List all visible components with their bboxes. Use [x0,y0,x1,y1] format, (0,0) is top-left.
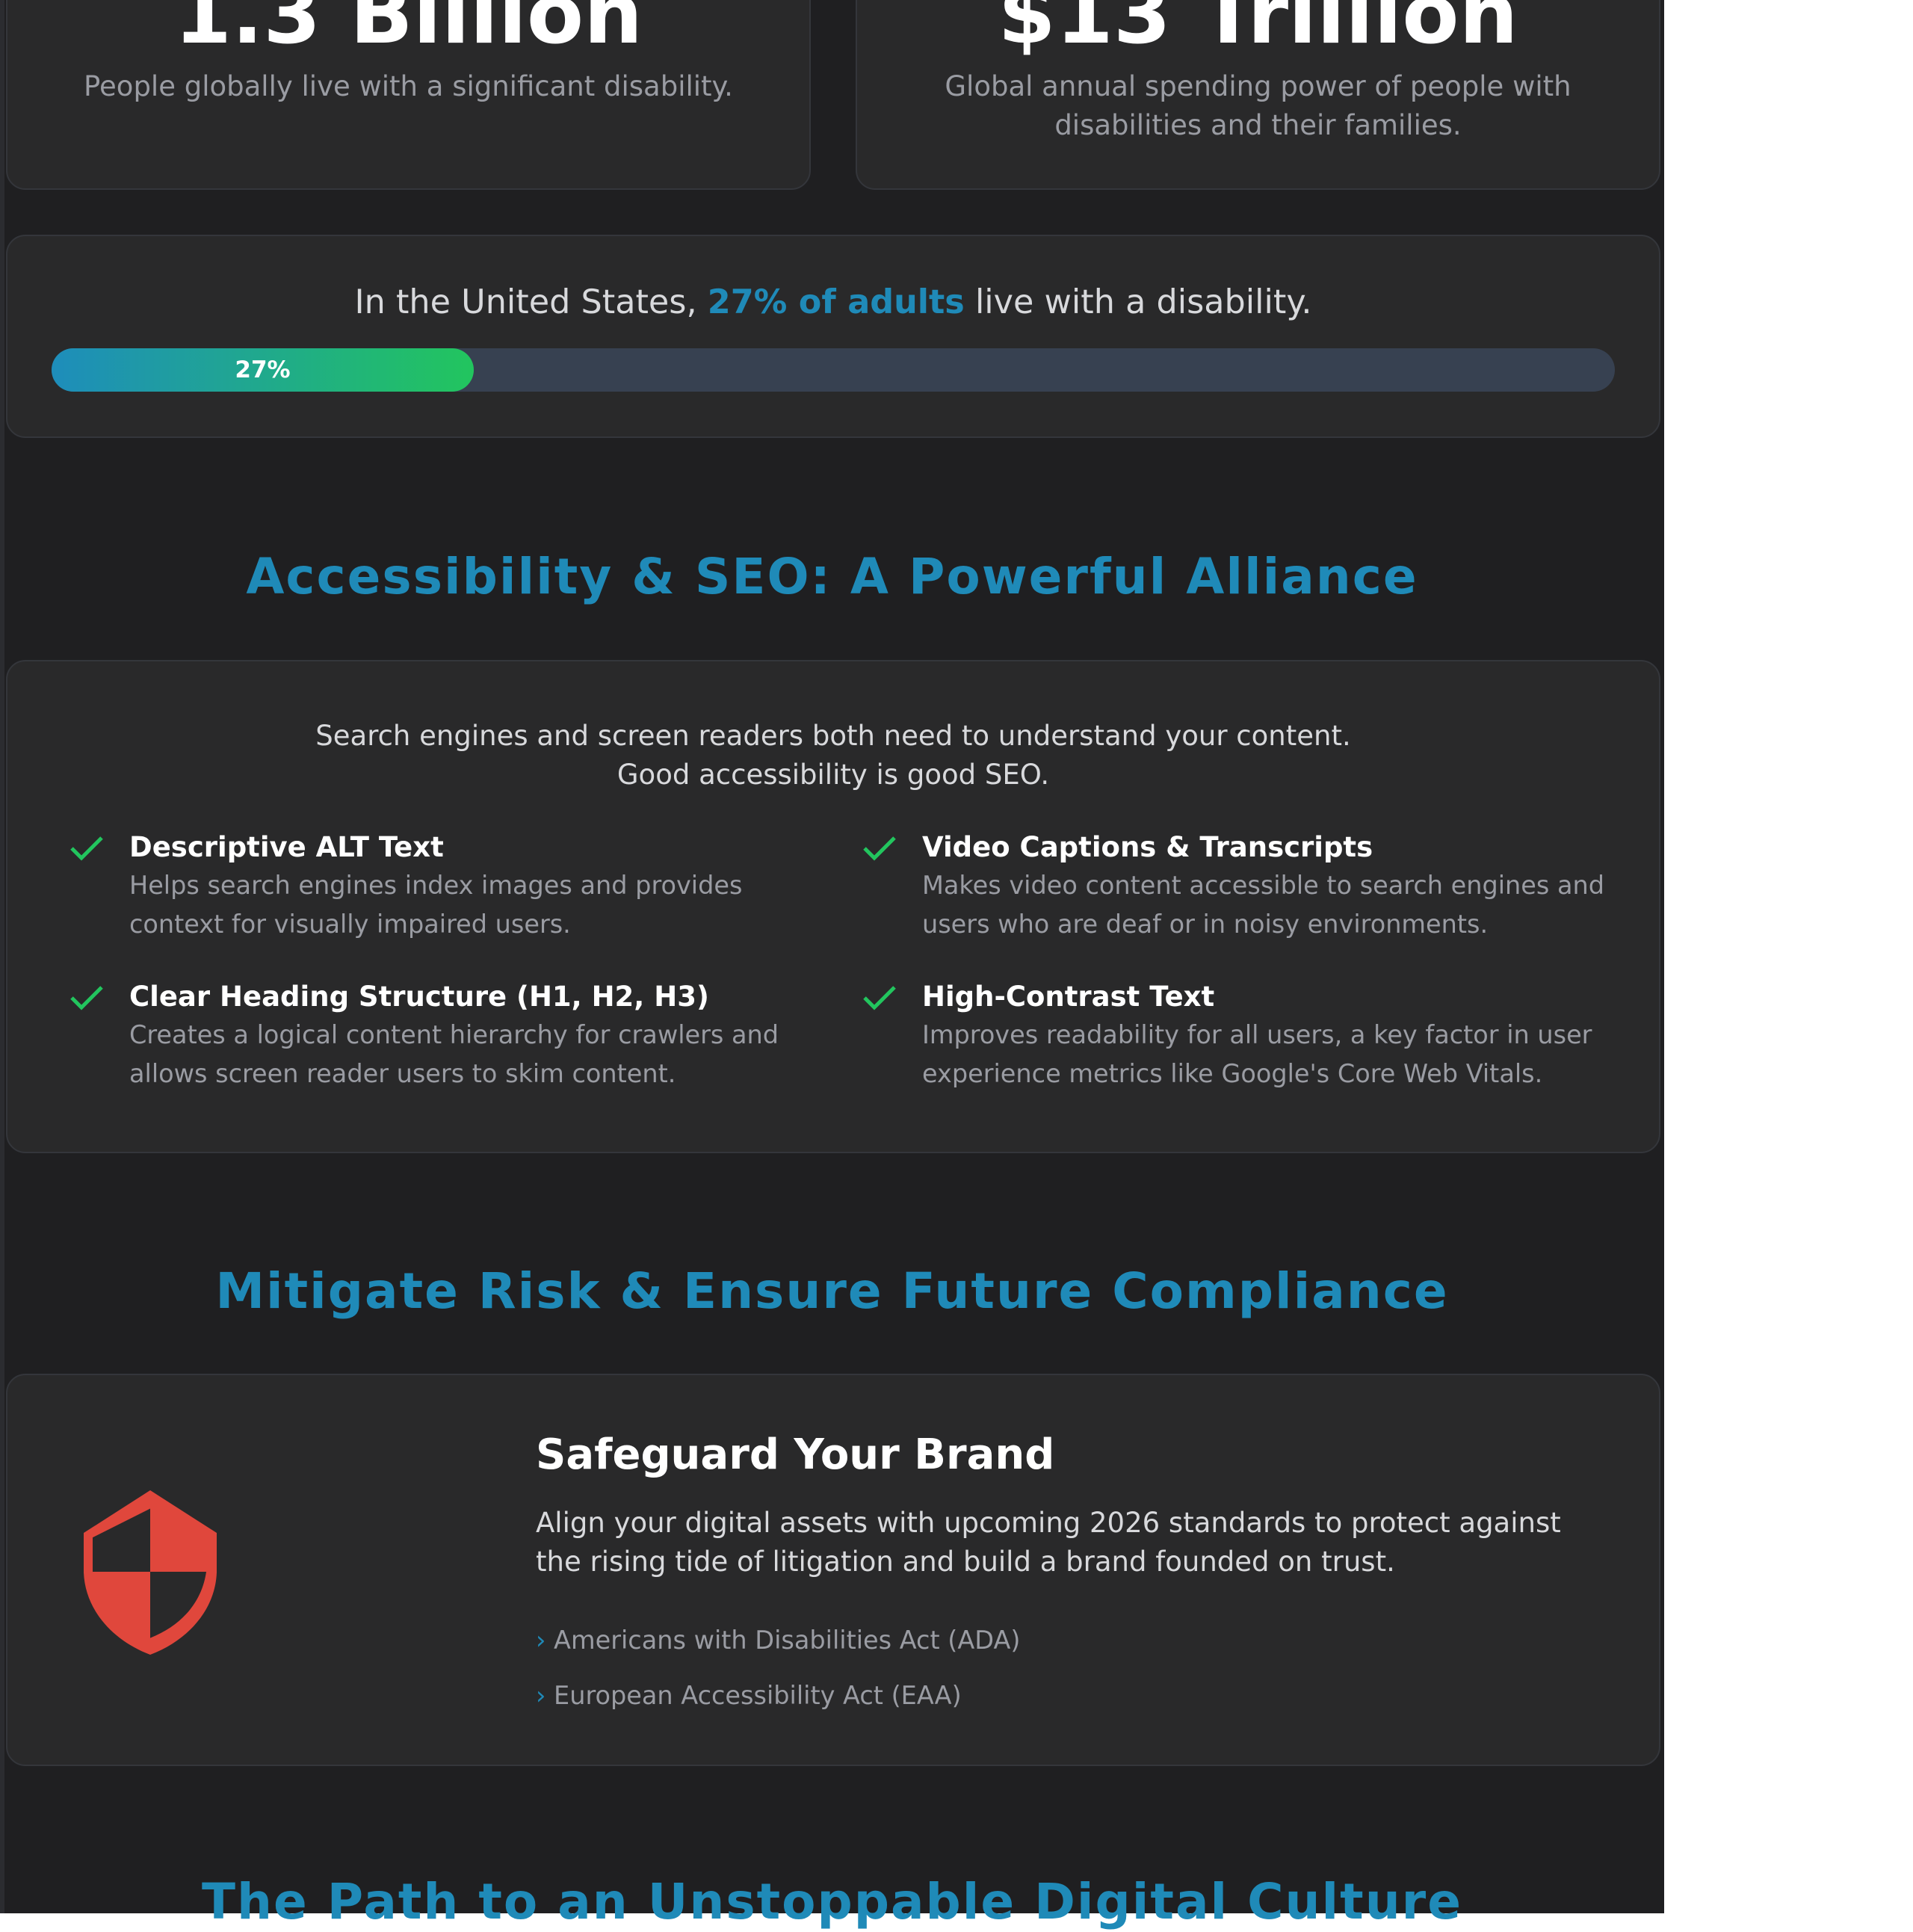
progress bar: 27% [235,357,291,383]
heading: accessibility & SEO: Accessibility & SEO: A Powerful Alliance [246,548,1418,605]
stat card: 1.3 billion [6,0,811,190]
item: captions: Video Captions & Transcripts [922,831,1373,863]
title: Safeguard Your Brand [536,1431,1054,1479]
item: contrast: Improves readability for all users, a key factor in user experience metrics like Google's Core Web Vitals. [922,1020,1592,1088]
list [536,1626,1020,1710]
heading: compliance: Mitigate Risk & Ensure Future Compliance [215,1262,1449,1320]
item: alt text: Helps search engines index images and provides context for visually impaired users. [129,871,742,939]
item: contrast: High-Contrast Text [922,981,1214,1013]
intro text: Search engines and screen readers both need to understand your content. [315,720,1351,752]
intro text: Good accessibility is good SEO. [617,759,1049,791]
item: headings [70,981,779,1088]
progress bar [52,348,1615,392]
item: contrast [863,981,1592,1088]
description: People globally live with a significant disability. [84,70,733,102]
stat card: 13 trillion [856,0,1660,190]
item: captions [863,831,1604,939]
list: › European Accessibility Act (EAA) [536,1681,962,1710]
description: Global annual spending power of people with disabilities and their families. [945,70,1571,141]
item: alt text [70,831,742,939]
item: captions: Makes video content accessible to search engines and users who are deaf or in noisy environments. [922,871,1604,939]
item: headings: Clear Heading Structure (H1, H2, H3) [129,981,709,1013]
statement: In the United States, 27% of adults live with a disability. [354,283,1311,321]
panel: safeguard brand [6,1374,1660,1766]
intro text [315,720,1351,791]
icon: shield [84,1490,217,1655]
paragraph: Align your digital assets with upcoming 2026 standards to protect against the rising tide of litigation and build a brand founded on trust. [536,1507,1561,1578]
heading: digital culture: The Path to an Unstoppable Digital Culture [202,1873,1462,1931]
panel: SEO checklist [6,660,1660,1153]
item: headings: Creates a logical content hierarchy for crawlers and allows screen reader users to skim content. [129,1020,779,1088]
panel: US disability progress [6,235,1660,438]
list: › Americans with Disabilities Act (ADA) [536,1626,1020,1655]
item: alt text: Descriptive ALT Text [129,831,444,863]
